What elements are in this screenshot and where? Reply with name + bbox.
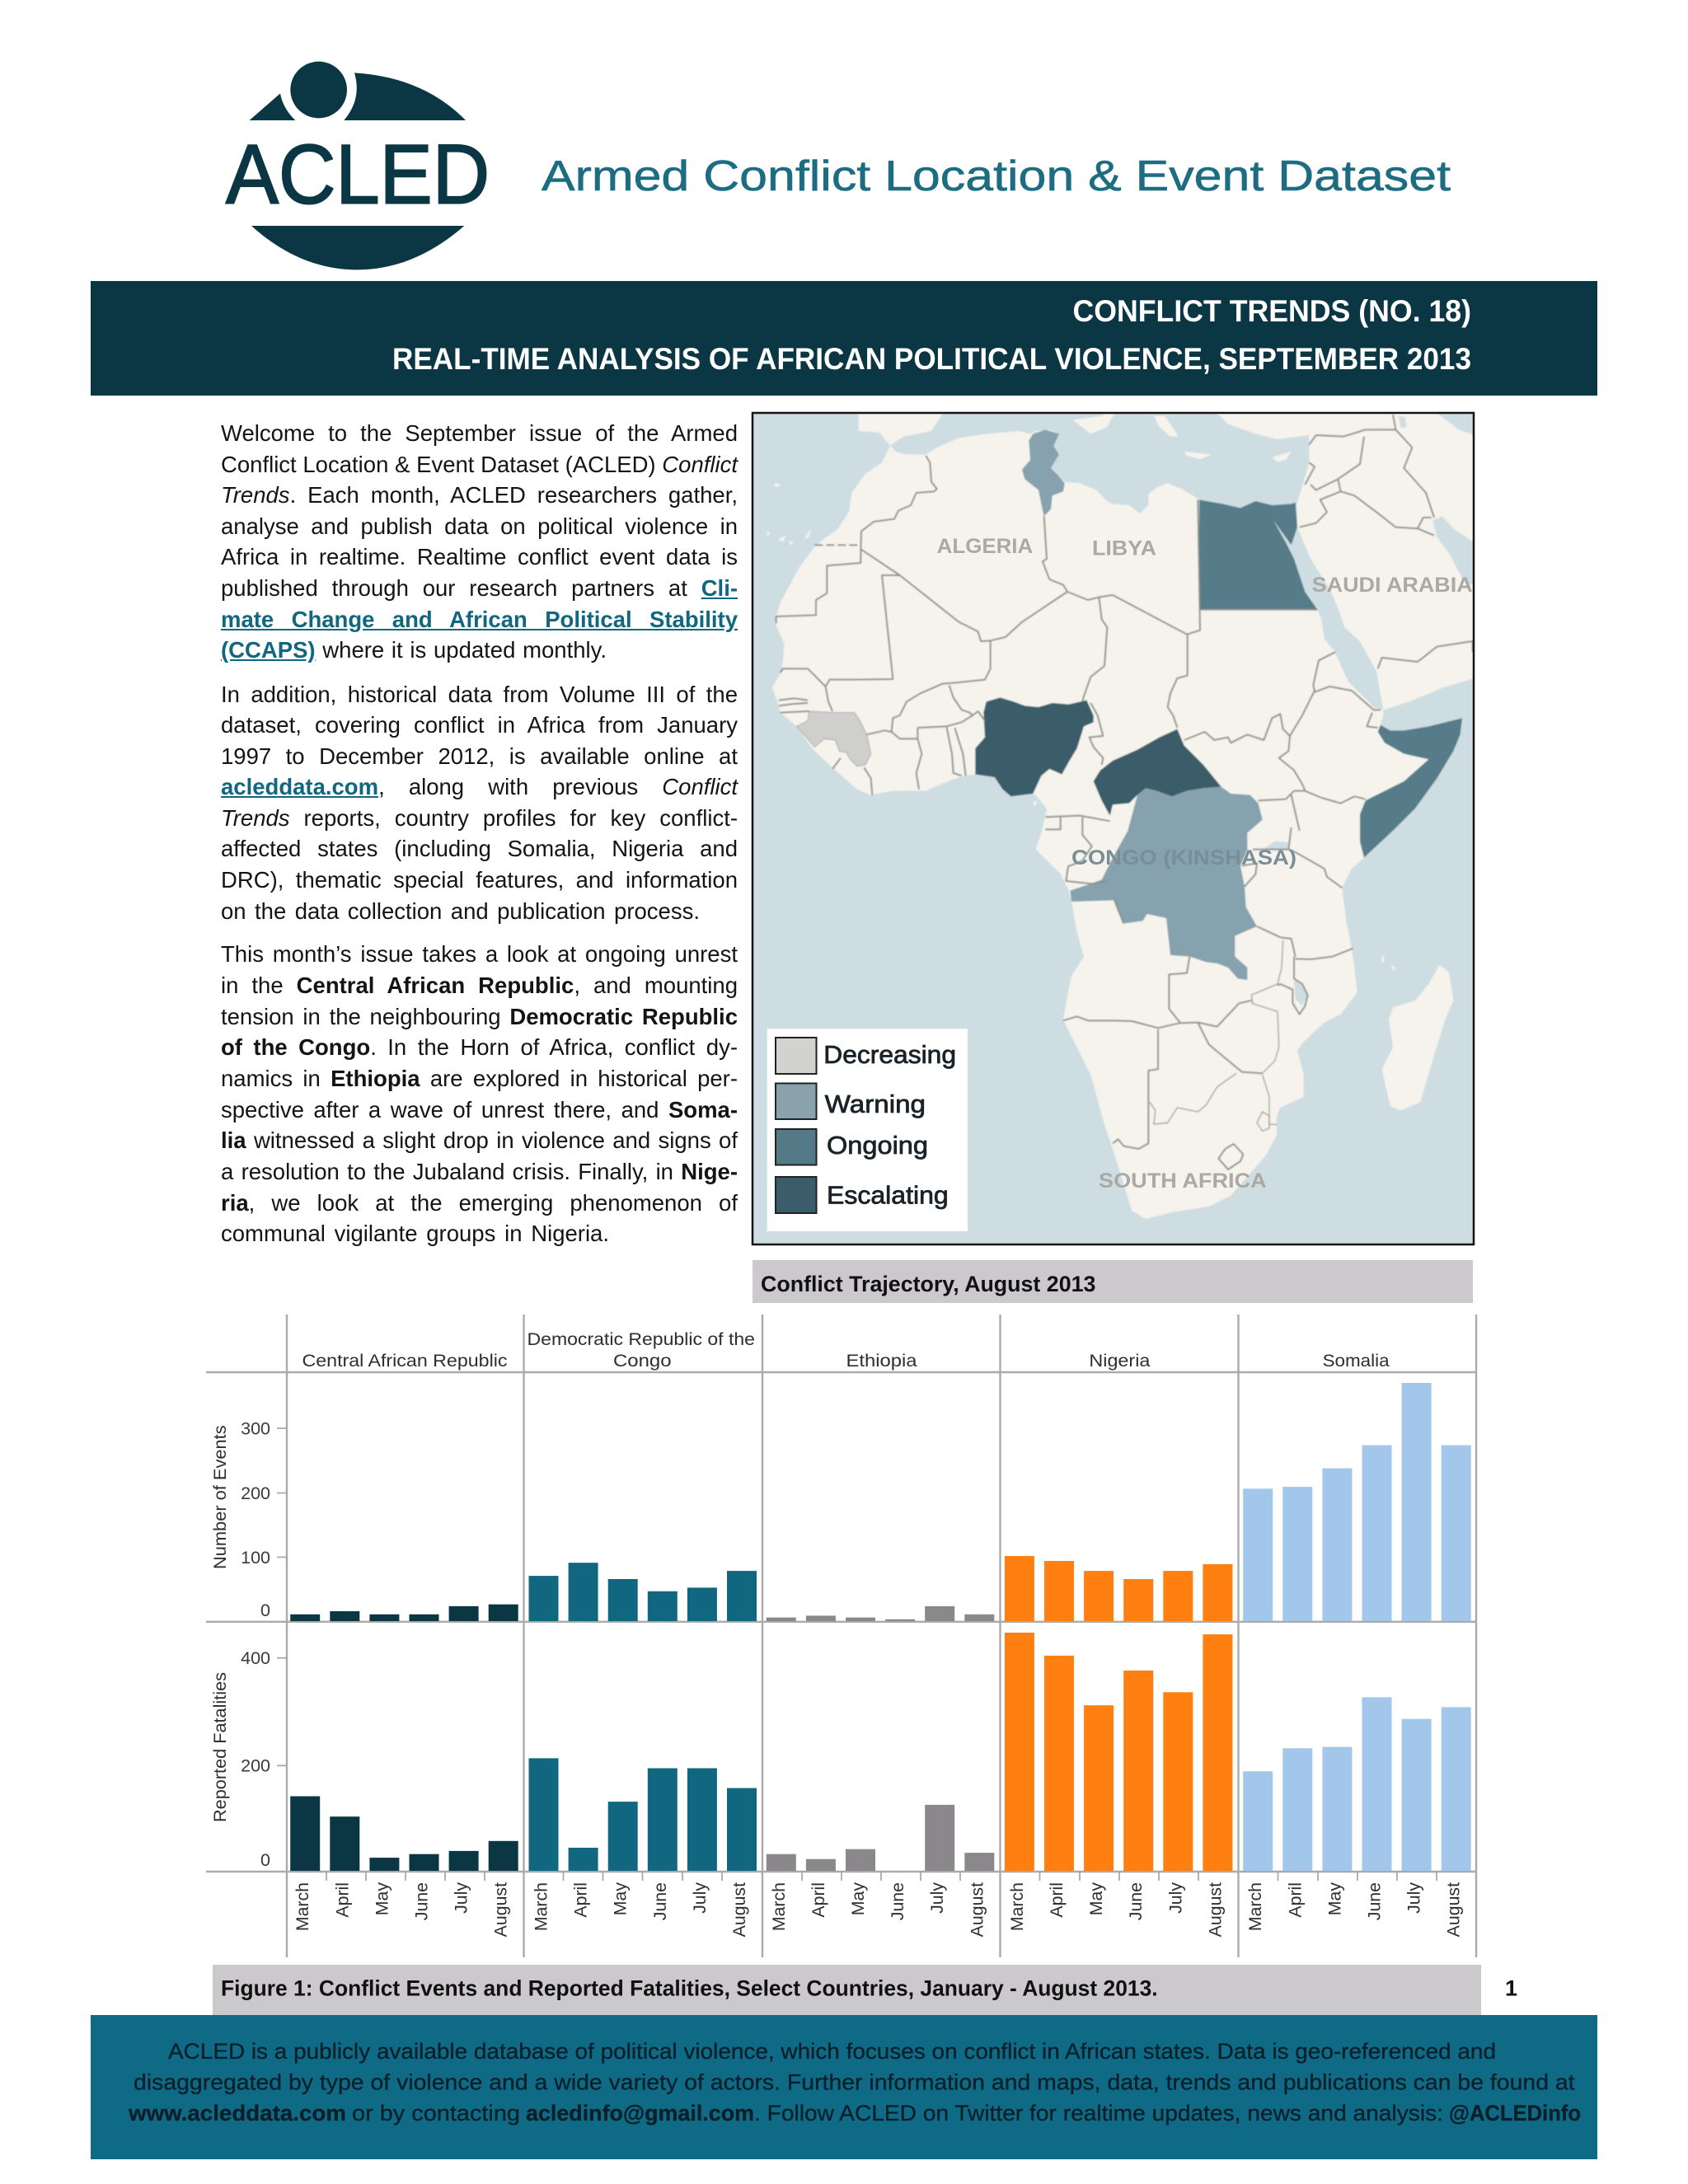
footer banner: or by contacting	[352, 2101, 520, 2125]
text: In addition, historical data from Volume III of the	[221, 681, 738, 707]
text: analyse and publish data on political violence in	[221, 513, 738, 539]
map labels: ALGERIA	[937, 535, 1033, 558]
month labels: July	[1165, 1882, 1185, 1914]
month labels: April	[571, 1882, 591, 1918]
small islands	[774, 483, 780, 487]
text: communal vigilante groups in Nigeria.	[221, 1221, 609, 1246]
month labels: March	[1245, 1882, 1265, 1931]
text: lia witnessed a slight drop in violence and signs of	[221, 1127, 738, 1153]
map: conflict trajectory of Africa	[91, 410, 1597, 2159]
text: Trends. Each month, ACLED researchers gather,	[221, 482, 738, 508]
text: DRC), thematic special features, and information	[221, 867, 738, 893]
footer banner	[91, 2015, 1597, 2159]
text block: intro paragraph	[221, 420, 738, 663]
text: This month’s issue takes a look at ongoing unrest	[221, 941, 738, 967]
country: DR Congo (warning)	[1070, 787, 1263, 980]
axis labels: 0	[260, 1850, 270, 1870]
text: in the Central African Republic, and mounting	[221, 972, 738, 998]
panel headers: Somalia	[1323, 1351, 1390, 1371]
text: on the data collection and publication process.	[221, 898, 700, 924]
month labels: May	[1325, 1882, 1344, 1915]
figure caption	[213, 1965, 1481, 2015]
map labels: SAUDI ARABIA	[1312, 574, 1473, 597]
bars: Nigeria	[1005, 1556, 1232, 1871]
header banner: CONFLICT TRENDS (NO. 18)	[1073, 294, 1471, 328]
map labels: CONGO (KINSHASA)	[1071, 846, 1296, 869]
month labels: June	[1126, 1882, 1146, 1920]
bars: Democratic Republic of the Congo	[529, 1563, 757, 1871]
text: Trends reports, country profiles for key conflict-	[221, 805, 738, 831]
text: spective after a wave of unrest there, and Soma-	[221, 1097, 738, 1122]
month labels: August	[1444, 1882, 1464, 1937]
country: Tunisia (warning)	[1022, 429, 1065, 516]
month labels: March	[769, 1882, 789, 1931]
bars: Central African Republic	[290, 1605, 518, 1871]
text: Conflict Location & Event Dataset (ACLED) Conflict	[221, 452, 738, 477]
axis labels: 100	[241, 1548, 270, 1568]
logo: ACLED emblem: ACLED	[226, 128, 490, 222]
month labels: August	[1205, 1882, 1225, 1937]
map legend: Warning	[825, 1090, 926, 1118]
figure caption: Figure 1: Conflict Events and Reported Fatalities, Select Countries, January - August 2013.	[221, 1976, 1158, 2001]
axis labels: Reported Fatalities	[210, 1672, 230, 1822]
footer banner: acledinfo@gmail.com	[526, 2101, 754, 2125]
axis labels: 200	[241, 1755, 270, 1775]
logo: ACLED emblem	[226, 62, 490, 269]
month labels: March	[531, 1882, 551, 1931]
month labels: May	[611, 1882, 631, 1915]
chart grid lines	[206, 1315, 1476, 1957]
country: Central African Republic (escalating)	[1094, 729, 1221, 816]
month labels: July	[690, 1882, 710, 1914]
text: Welcome to the September issue of the Armed	[221, 420, 738, 446]
chart: conflict events and reported fatalities small multiples	[206, 1315, 1476, 1957]
text: a resolution to the Jubaland crisis. Finally, in Nige-	[221, 1159, 738, 1184]
month labels: July	[452, 1882, 471, 1914]
month labels: June	[1365, 1882, 1385, 1920]
panel headers	[302, 1329, 1390, 1371]
map labels	[937, 535, 1473, 1193]
country: Nigeria (escalating)	[975, 697, 1094, 796]
map legend: Escalating	[827, 1181, 949, 1210]
text: dataset, covering conflict in Africa from January	[221, 712, 738, 738]
text: 1997 to December 2012, is available online at	[221, 743, 738, 769]
axis labels: 300	[241, 1419, 270, 1439]
month labels: March	[293, 1882, 312, 1931]
map caption: Conflict Trajectory, August 2013	[761, 1272, 1095, 1296]
footer banner: www.acleddata.com	[128, 2101, 346, 2125]
map labels: LIBYA	[1092, 537, 1156, 560]
map legend: Ongoing	[827, 1131, 928, 1160]
text: published through our research partners at Cli-	[221, 575, 738, 601]
text: mate Change and African Political Stability	[221, 607, 738, 632]
header banner	[91, 281, 1597, 396]
month labels: June	[888, 1882, 907, 1920]
month labels: April	[1047, 1882, 1067, 1918]
text: namics in Ethiopia are explored in historical per-	[221, 1066, 738, 1091]
axis labels: Number of Events	[210, 1425, 230, 1569]
panel headers: Nigeria	[1089, 1351, 1150, 1371]
map legend	[767, 1029, 968, 1231]
text block: this month's issue paragraph	[221, 941, 738, 1246]
panel headers: Congo	[613, 1351, 672, 1371]
map frame	[753, 413, 1474, 1244]
month labels: March	[1007, 1882, 1027, 1931]
map labels: SOUTH AFRICA	[1099, 1169, 1267, 1193]
month labels: July	[927, 1882, 947, 1914]
text: of the Congo. In the Horn of Africa, conflict dy-	[221, 1034, 738, 1060]
month labels: April	[809, 1882, 828, 1918]
panel headers: Democratic Republic of the	[528, 1329, 755, 1349]
text: (CCAPS) where it is updated monthly.	[221, 637, 607, 663]
axis labels	[210, 1419, 270, 1870]
map caption	[753, 1260, 1473, 1303]
text: tension in the neighbouring Democratic Republic	[221, 1004, 738, 1029]
footer banner: @ACLEDinfo	[1449, 2101, 1581, 2125]
month labels: April	[1285, 1882, 1305, 1918]
month labels: June	[650, 1882, 670, 1920]
text: Africa in realtime. Realtime conflict event data is	[221, 544, 738, 569]
month labels: August	[729, 1882, 749, 1937]
panel headers: Central African Republic	[302, 1351, 508, 1371]
month labels: May	[848, 1882, 868, 1915]
month labels: June	[412, 1882, 432, 1920]
country: Egypt (ongoing)	[1199, 499, 1317, 610]
panel headers: Ethiopia	[846, 1351, 917, 1371]
month labels: July	[1404, 1882, 1424, 1914]
month labels: April	[332, 1882, 352, 1918]
axis labels: 0	[260, 1601, 270, 1620]
title: organisation name: Armed Conflict Location & Event Dataset	[542, 152, 1451, 200]
text block: historical data paragraph	[221, 681, 738, 924]
axis labels: 400	[241, 1648, 270, 1668]
footer banner: ACLED is a publicly available database of political violence, which focuses on conflict in African states. Data is geo-referenced and	[168, 2039, 1496, 2064]
footer banner: . Follow ACLED on Twitter for realtime updates, news and analysis:	[754, 2101, 1443, 2125]
page number: 1	[1505, 1976, 1517, 2001]
text: ria, we look at the emerging phenomenon of	[221, 1190, 738, 1216]
text: acleddata.com, along with previous Conflict	[221, 774, 738, 799]
country: Guinea (decreasing)	[797, 711, 871, 766]
bars: Somalia	[1243, 1383, 1471, 1871]
month labels: August	[491, 1882, 511, 1937]
text: affected states (including Somalia, Nigeria and	[221, 836, 738, 861]
month labels: May	[372, 1882, 392, 1915]
map legend: Decreasing	[823, 1040, 956, 1069]
footer banner: disaggregated by type of violence and a wide variety of actors. Further information and maps, data, trends and publications can be found at	[134, 2070, 1575, 2095]
month labels: May	[1086, 1882, 1106, 1915]
month labels	[293, 1882, 1464, 1937]
month labels: August	[967, 1882, 987, 1937]
bars: Ethiopia	[767, 1606, 994, 1871]
axis labels: 200	[241, 1483, 270, 1503]
country: Somalia (ongoing)	[1360, 718, 1462, 858]
header banner: REAL-TIME ANALYSIS OF AFRICAN POLITICAL VIOLENCE, SEPTEMBER 2013	[392, 342, 1471, 376]
